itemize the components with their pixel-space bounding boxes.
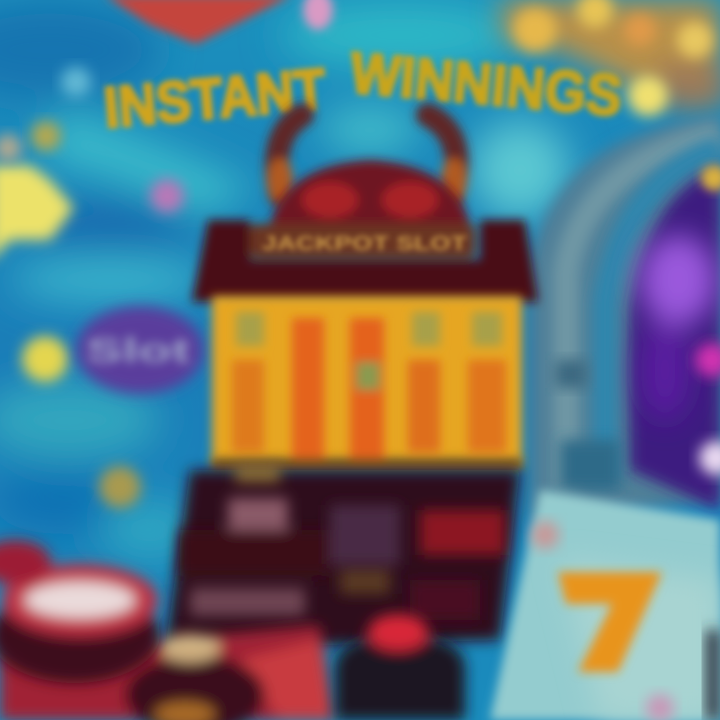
heading — [101, 40, 624, 141]
purple badge — [76, 306, 204, 394]
machine top — [192, 160, 538, 302]
red button — [335, 614, 465, 720]
title plate: JACKPOT SLOT — [262, 233, 467, 255]
heading: INSTANT — [101, 56, 328, 141]
number seven — [558, 572, 662, 672]
top red gem — [105, 0, 333, 44]
left coin — [22, 336, 68, 382]
left star burst — [0, 67, 184, 262]
heading: WINNINGS — [348, 40, 624, 129]
playing card — [490, 490, 720, 720]
casino chips — [0, 540, 160, 683]
purple badge: Slot — [86, 332, 190, 370]
reels panel — [212, 296, 522, 466]
small coin — [99, 466, 141, 508]
horns — [267, 115, 467, 202]
lower body — [165, 464, 520, 650]
right arch machine — [530, 118, 720, 520]
top right gold coins — [500, 0, 720, 116]
bottom floor — [0, 625, 335, 720]
dark right edge — [706, 630, 720, 720]
reels — [212, 312, 522, 470]
